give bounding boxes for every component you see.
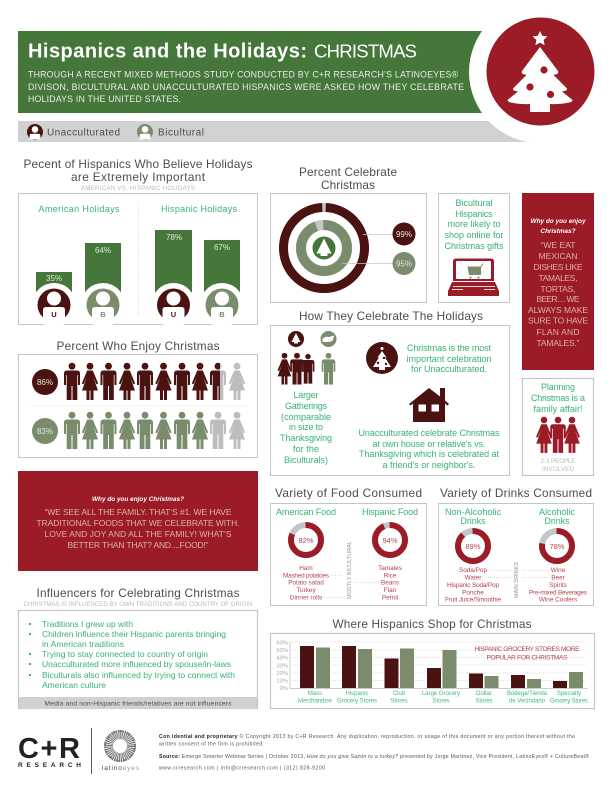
person badges: U bbox=[171, 310, 176, 319]
Hispanic food list: Tamales bbox=[378, 565, 402, 572]
American food list: Turkey bbox=[296, 587, 316, 594]
list text: in American traditions bbox=[42, 639, 124, 649]
panel: red quote sidebar bbox=[522, 193, 594, 370]
alcoholic list: Pre-mixed Beverages bbox=[529, 590, 587, 596]
category labels: Stores bbox=[432, 698, 450, 704]
celebrate at home text: at own house or relative's vs. bbox=[372, 439, 486, 449]
bar values: 78% bbox=[166, 233, 182, 242]
heading: variety of food: Variety of Food Consumed bbox=[275, 486, 422, 500]
non-alcoholic list: Fruit Juice/Smoothie bbox=[445, 596, 501, 604]
footer text bbox=[159, 733, 589, 772]
online shopping text: Christmas gifts bbox=[444, 241, 504, 251]
bicultural figures bbox=[64, 412, 245, 449]
heading: holidays importance bbox=[24, 157, 253, 192]
alcoholic list: Beer bbox=[551, 574, 566, 582]
quote: LOVE AND JOY AND ALL THE FAMILY! WHAT’S bbox=[44, 529, 232, 539]
American food list: Mashed potatoes bbox=[283, 572, 329, 580]
most important text: important celebration bbox=[406, 354, 492, 364]
vertical label: MOSTLY BICULTURAL bbox=[347, 541, 353, 599]
non-alcoholic list: Water bbox=[465, 574, 482, 582]
y axis labels: 60% bbox=[276, 640, 288, 646]
sidebar quote: ALWAYS MAKE bbox=[528, 305, 588, 315]
bar values: 67% bbox=[214, 243, 230, 252]
header banner bbox=[18, 1, 611, 143]
category labels: Dollar bbox=[476, 691, 492, 697]
panel: how they celebrate bbox=[270, 326, 510, 476]
non-alcoholic list bbox=[445, 567, 501, 604]
sidebar quote: TAMALES.” bbox=[536, 338, 580, 348]
question: Why do you enjoy Christmas? bbox=[92, 496, 184, 503]
panel: holidays bar chart bbox=[18, 194, 258, 327]
Hispanic food list: Rice bbox=[384, 572, 397, 580]
legend: bicultural: Bicultural bbox=[158, 128, 204, 138]
sidebar quote: SURE TO HAVE bbox=[528, 316, 588, 326]
y axis labels: 20% bbox=[276, 671, 288, 677]
sidebar quote bbox=[528, 240, 588, 348]
y axis labels: 50% bbox=[276, 648, 288, 654]
unacculturated figures bbox=[64, 363, 245, 400]
legend: unacculturated: Unacculturated bbox=[47, 128, 120, 138]
y axis labels: 40% bbox=[276, 656, 288, 662]
most important text bbox=[406, 343, 492, 374]
main title: Hispanics and the Holidays: bbox=[28, 40, 307, 62]
donut 78%: 78% bbox=[549, 542, 565, 551]
C+R Research logo: C+R bbox=[18, 733, 80, 765]
category labels: Hispanic bbox=[345, 691, 369, 697]
icon: small tree bbox=[288, 331, 304, 347]
99% callout: 99% bbox=[396, 230, 412, 239]
family affair text: Planning bbox=[541, 382, 575, 392]
heading: percent who enjoy: Percent Who Enjoy Christmas bbox=[56, 339, 220, 353]
icon: small turkey bbox=[320, 331, 336, 347]
quote: TRADITIONAL FOODS THAT WE CELEBRATE WITH. bbox=[36, 518, 240, 528]
non-alcoholic list: Soda/Pop bbox=[459, 567, 487, 574]
alcoholic column: Drinks bbox=[544, 516, 570, 526]
panel: food bbox=[270, 504, 426, 606]
non-alcoholic column: Drinks bbox=[460, 516, 486, 526]
y axis labels bbox=[276, 640, 288, 692]
panel: online shopping bbox=[438, 194, 510, 302]
category labels: Stores bbox=[475, 698, 493, 704]
heading: percent celebrate: Christmas bbox=[321, 178, 375, 192]
online shopping text: Bicultural bbox=[456, 198, 492, 208]
gridlines bbox=[291, 642, 586, 680]
alcoholic list: Wine bbox=[551, 567, 566, 574]
family affair text bbox=[531, 382, 585, 414]
donut 89%: 89% bbox=[465, 542, 481, 551]
Hispanic food list: Pernil bbox=[382, 594, 398, 602]
category labels: de Vecindario bbox=[509, 698, 546, 704]
83% badge bbox=[32, 418, 58, 444]
icon: laptop with cart bbox=[448, 258, 499, 296]
unacculturated bars bbox=[300, 646, 567, 688]
American food column: American Food bbox=[276, 507, 336, 517]
online shopping text: Hispanics bbox=[456, 209, 493, 219]
person badges: B bbox=[219, 310, 225, 319]
person badges bbox=[32, 283, 244, 327]
86% badge: 86% bbox=[37, 378, 53, 387]
alcoholic list: Spirits bbox=[549, 582, 567, 589]
heading: where hispanics shop: Where Hispanics Shop for Christmas bbox=[332, 617, 532, 631]
Hispanic food column: Hispanic Food bbox=[362, 507, 418, 517]
category labels: Large Grocery bbox=[422, 691, 460, 697]
panel: red quote wide bbox=[18, 471, 258, 571]
American food column bbox=[276, 507, 336, 602]
legend: bicultural bbox=[137, 124, 204, 140]
heading: how they celebrate: How They Celebrate The Holidays bbox=[299, 309, 483, 323]
quote: BETTER THAN THAT? AND....FOOD!” bbox=[68, 540, 209, 550]
y axis labels: 0% bbox=[280, 686, 288, 692]
panel: drinks bbox=[438, 504, 594, 606]
donut 82%: 82% bbox=[298, 536, 314, 545]
heading: influencers bbox=[24, 586, 252, 608]
sidebar quote: MEXICAN bbox=[538, 251, 578, 261]
vertical label: MAIN DRINKS bbox=[514, 562, 520, 598]
category labels: Merchandise bbox=[298, 698, 333, 704]
chart annotation: POPULAR FOR CHRISTMAS bbox=[486, 654, 568, 662]
heading: percent celebrate bbox=[299, 165, 397, 192]
American food list: Dinner rolls bbox=[290, 594, 322, 602]
Hispanic food list bbox=[378, 565, 402, 602]
axis bbox=[290, 642, 588, 688]
C+R Research logo: RESEARCH bbox=[18, 762, 81, 769]
person badges: U bbox=[51, 310, 57, 319]
list text: Biculturals also influenced by trying to connect with bbox=[42, 670, 235, 680]
86% badge bbox=[32, 369, 58, 395]
people involved note: 2-3 PEOPLE bbox=[540, 458, 576, 465]
non-alcoholic list: Hispanic Soda/Pop bbox=[447, 582, 499, 589]
non-alcoholic column bbox=[445, 507, 502, 604]
sidebar question: Christmas? bbox=[540, 228, 576, 235]
main title: CHRISTMAS bbox=[314, 40, 417, 62]
83% badge: 83% bbox=[37, 427, 53, 436]
category labels: Club bbox=[393, 691, 406, 697]
alcoholic list: Wine Coolers bbox=[539, 596, 577, 604]
list text: Children influence their Hispanic parents bringing bbox=[42, 629, 226, 639]
alcoholic column bbox=[529, 507, 587, 604]
quote: “WE SEE ALL THE FAMILY. THAT’S #1. WE HAVE bbox=[44, 507, 232, 517]
larger gatherings text: Gatherings bbox=[285, 401, 328, 411]
chart annotation: HISPANIC GROCERY STORES MORE bbox=[474, 646, 580, 653]
intro paragraph: DIVISON, BICULTURAL AND UNACCULTURATED HISPANICS WERE ASKED HOW THEY CELEBRATE bbox=[28, 82, 464, 92]
larger gatherings text: (comparable bbox=[281, 412, 331, 422]
larger gatherings text: Biculturals) bbox=[284, 455, 328, 465]
centre tree icon bbox=[312, 236, 336, 260]
legend bar bbox=[18, 1, 611, 143]
bar values: 35% bbox=[46, 274, 62, 283]
y axis labels: 10% bbox=[276, 678, 288, 684]
sidebar quote: BEER… WE bbox=[536, 294, 580, 304]
category labels: Mass bbox=[308, 691, 322, 697]
category labels bbox=[298, 691, 588, 704]
bullets bbox=[29, 623, 31, 676]
chart annotation bbox=[474, 646, 580, 662]
sidebar quote: TORTAS, bbox=[540, 284, 576, 294]
category labels: Bodega/Tienda bbox=[507, 691, 548, 697]
category labels: Grocery Stores bbox=[550, 698, 588, 704]
celebrate at home text bbox=[358, 428, 500, 470]
larger gatherings text bbox=[280, 390, 332, 465]
category labels: Specialty bbox=[557, 691, 581, 697]
footer text: Source: Emerge Smarter Webinar Series | October 2013, How do you give Sazón to a turkey? presented by Jorge Martinez, Vice President, LatinoEyes® + CultureBeat® bbox=[159, 753, 589, 760]
most important text: Christmas is the most bbox=[407, 343, 491, 353]
intro paragraph: HOLIDAYS IN THE UNITED STATES. bbox=[28, 94, 181, 104]
sidebar question: Why do you enjoy bbox=[530, 218, 586, 225]
sidebar quote: DISHES LIKE bbox=[534, 262, 583, 272]
larger gatherings text: Thanksgiving bbox=[280, 433, 332, 443]
category labels: Grocery Stores bbox=[337, 698, 377, 704]
panel: shopping bar chart bbox=[270, 634, 594, 708]
list text: American culture bbox=[42, 680, 106, 690]
bars bbox=[36, 230, 240, 292]
latinoeyes logo bbox=[102, 731, 140, 772]
American food list: Ham bbox=[299, 565, 313, 572]
outer ring 99% bbox=[284, 208, 364, 288]
people involved note: INVOLVED bbox=[542, 466, 575, 473]
family affair text: family affair! bbox=[534, 404, 582, 414]
quote bbox=[36, 507, 240, 550]
footer text: www.crresearch.com | info@crresearch.com | (312) 828-9200 bbox=[159, 766, 325, 772]
icon: three people bbox=[536, 417, 580, 453]
95% callout: 95% bbox=[396, 260, 412, 268]
panel: family affair bbox=[522, 378, 594, 476]
online shopping text: shop online for bbox=[444, 230, 504, 240]
family affair text: Christmas is a bbox=[531, 393, 585, 403]
people involved note bbox=[540, 458, 576, 473]
panel: influencers list bbox=[18, 610, 258, 709]
heading: holidays importance: AMERICAN VS. HISPANIC HOLIDAYS bbox=[81, 185, 195, 192]
American Holidays label: American Holidays bbox=[38, 204, 120, 214]
list text: Traditions I grew up with bbox=[42, 619, 133, 629]
95% callout bbox=[392, 252, 416, 275]
icon: family group bbox=[278, 353, 314, 384]
panel: percent who enjoy pictogram bbox=[18, 354, 258, 458]
Hispanic food list: Flan bbox=[384, 587, 397, 594]
alcoholic column: Alcoholic bbox=[539, 507, 576, 517]
list text: Unacculturated more influenced by spouse/in-laws bbox=[42, 659, 231, 669]
grey footer note bbox=[19, 697, 257, 709]
99% callout bbox=[392, 222, 416, 246]
inner ring 95% bbox=[301, 225, 347, 271]
larger gatherings text: in size to bbox=[289, 422, 323, 432]
heading: influencers: CHRISTMAS IS INFLUENCED BY OWN TRADITIONS AND COUNTRY OF ORIGIN bbox=[24, 601, 252, 608]
larger gatherings text: for the bbox=[293, 444, 319, 454]
heading: influencers: Influencers for Celebrating Christmas bbox=[36, 586, 240, 600]
celebrate at home text: a friend's or neighbor's. bbox=[382, 460, 476, 470]
alcoholic list bbox=[529, 567, 587, 604]
online shopping text: more likely to bbox=[448, 219, 500, 229]
footer text: Con idential and proprietary © Copyright 2013 by C+R Research. Any duplication, reproduction, or usage of this document or any portion thereof without the bbox=[159, 733, 575, 740]
bicultural bars bbox=[316, 648, 583, 688]
American food list: Potato salad bbox=[288, 580, 324, 586]
latinoeyes logo: latinoeyes bbox=[102, 765, 140, 772]
most important text: for Unacculturated. bbox=[411, 364, 487, 374]
list text: Trying to stay connected to country of origin bbox=[42, 649, 208, 659]
sidebar quote: “WE EAT bbox=[540, 240, 576, 250]
Hispanic Holidays label: Hispanic Holidays bbox=[161, 204, 238, 214]
non-alcoholic column: Non-Alcoholic bbox=[445, 507, 502, 517]
sidebar quote: FLAN AND bbox=[536, 327, 580, 337]
sidebar quote: TAMALES, bbox=[538, 273, 578, 283]
icon: single person bbox=[322, 353, 335, 384]
non-alcoholic list: Ponche bbox=[462, 590, 484, 596]
donut 94%: 94% bbox=[382, 536, 398, 545]
icon: christmas tree badge bbox=[486, 18, 594, 126]
person badges: B bbox=[100, 310, 106, 319]
Hispanic food column bbox=[362, 507, 418, 602]
bar values: 64% bbox=[95, 246, 111, 255]
celebrate at home text: Unacculturated celebrate Christmas bbox=[358, 428, 500, 438]
bar values bbox=[46, 233, 230, 283]
American food list bbox=[283, 565, 329, 602]
grey footer note: Media and non-Hispanic friends/relatives are not influencers bbox=[44, 700, 232, 708]
heading: holidays importance: are Extremely Important bbox=[71, 170, 206, 184]
list text bbox=[42, 619, 235, 690]
y axis labels: 30% bbox=[276, 664, 288, 670]
panel: percent celebrate rings bbox=[270, 194, 426, 302]
legend: unacculturated bbox=[27, 124, 120, 140]
footer text: written consent of the firm is prohibited. bbox=[159, 742, 264, 748]
larger gatherings text: Larger bbox=[294, 390, 318, 400]
heading: variety of drinks: Variety of Drinks Consumed bbox=[440, 486, 592, 500]
icon: house bbox=[409, 388, 449, 422]
online shopping text bbox=[444, 198, 504, 251]
icon: tree circle bbox=[366, 342, 398, 374]
category labels: Stores bbox=[390, 698, 408, 704]
sidebar question bbox=[530, 218, 586, 235]
celebrate at home text: Thanksgiving which is celebrated at bbox=[359, 449, 499, 459]
Hispanic food list: Beans bbox=[381, 580, 399, 586]
intro paragraph bbox=[28, 70, 464, 104]
intro paragraph: THROUGH A RECENT MIXED METHODS STUDY CONDUCTED BY C+R RESEARCH’S LATINOEYES® bbox=[28, 70, 459, 80]
heading: holidays importance: Pecent of Hispanics Who Believe Holidays bbox=[24, 157, 253, 171]
heading: percent celebrate: Percent Celebrate bbox=[299, 165, 397, 179]
